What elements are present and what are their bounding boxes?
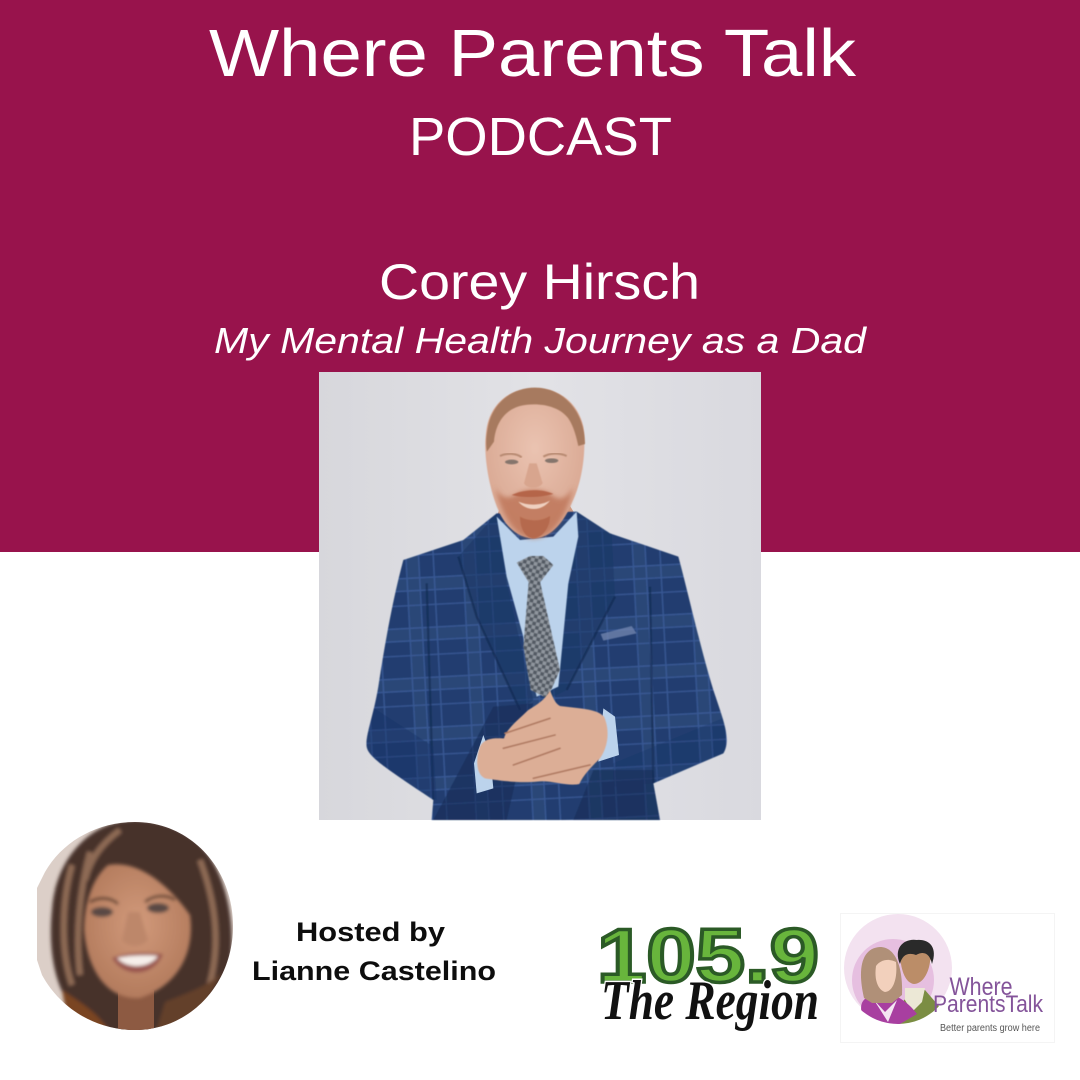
- host hair: [51, 820, 232, 1035]
- guest name: Corey Hirsch: [379, 254, 700, 310]
- logo: 105.9 The Region: [597, 914, 819, 1032]
- hosted by label: Hosted by: [296, 917, 445, 947]
- guest hands: [477, 691, 608, 785]
- logo tagline: Better parents grow here: [940, 1023, 1040, 1034]
- logo: Where Parents Talk: [840, 914, 1054, 1042]
- episode title: My Mental Health Journey as a Dad: [214, 320, 867, 361]
- maroon header band: [0, 0, 1080, 552]
- logo: 105.9 The Region: 105.9: [597, 914, 819, 999]
- logo circles: [844, 914, 952, 1022]
- guest jacket: [366, 512, 727, 820]
- guest shirt cuffs: [474, 708, 619, 793]
- guest shirt: [497, 512, 578, 697]
- logo: Where Parents Talk: ParentsTalk: [933, 991, 1044, 1018]
- guest head: [485, 388, 585, 538]
- title: Where Parents Talk: [209, 16, 857, 91]
- host neck: [118, 990, 154, 1030]
- host name: Lianne Castelino: [252, 956, 496, 986]
- logo: 105.9 The Region: The Region: [601, 970, 819, 1032]
- host credit: [252, 917, 496, 986]
- subtitle: podcast: PODCAST: [409, 107, 672, 167]
- guest neck: [497, 503, 577, 547]
- host face: [84, 864, 191, 998]
- guest tie: [517, 556, 560, 698]
- logo wordmark: Where: [950, 973, 1012, 1001]
- guest portrait photo: [319, 372, 761, 820]
- host portrait photo: [37, 822, 233, 1030]
- logo illustrated couple: [861, 940, 944, 1024]
- guest pocket square: [601, 626, 637, 641]
